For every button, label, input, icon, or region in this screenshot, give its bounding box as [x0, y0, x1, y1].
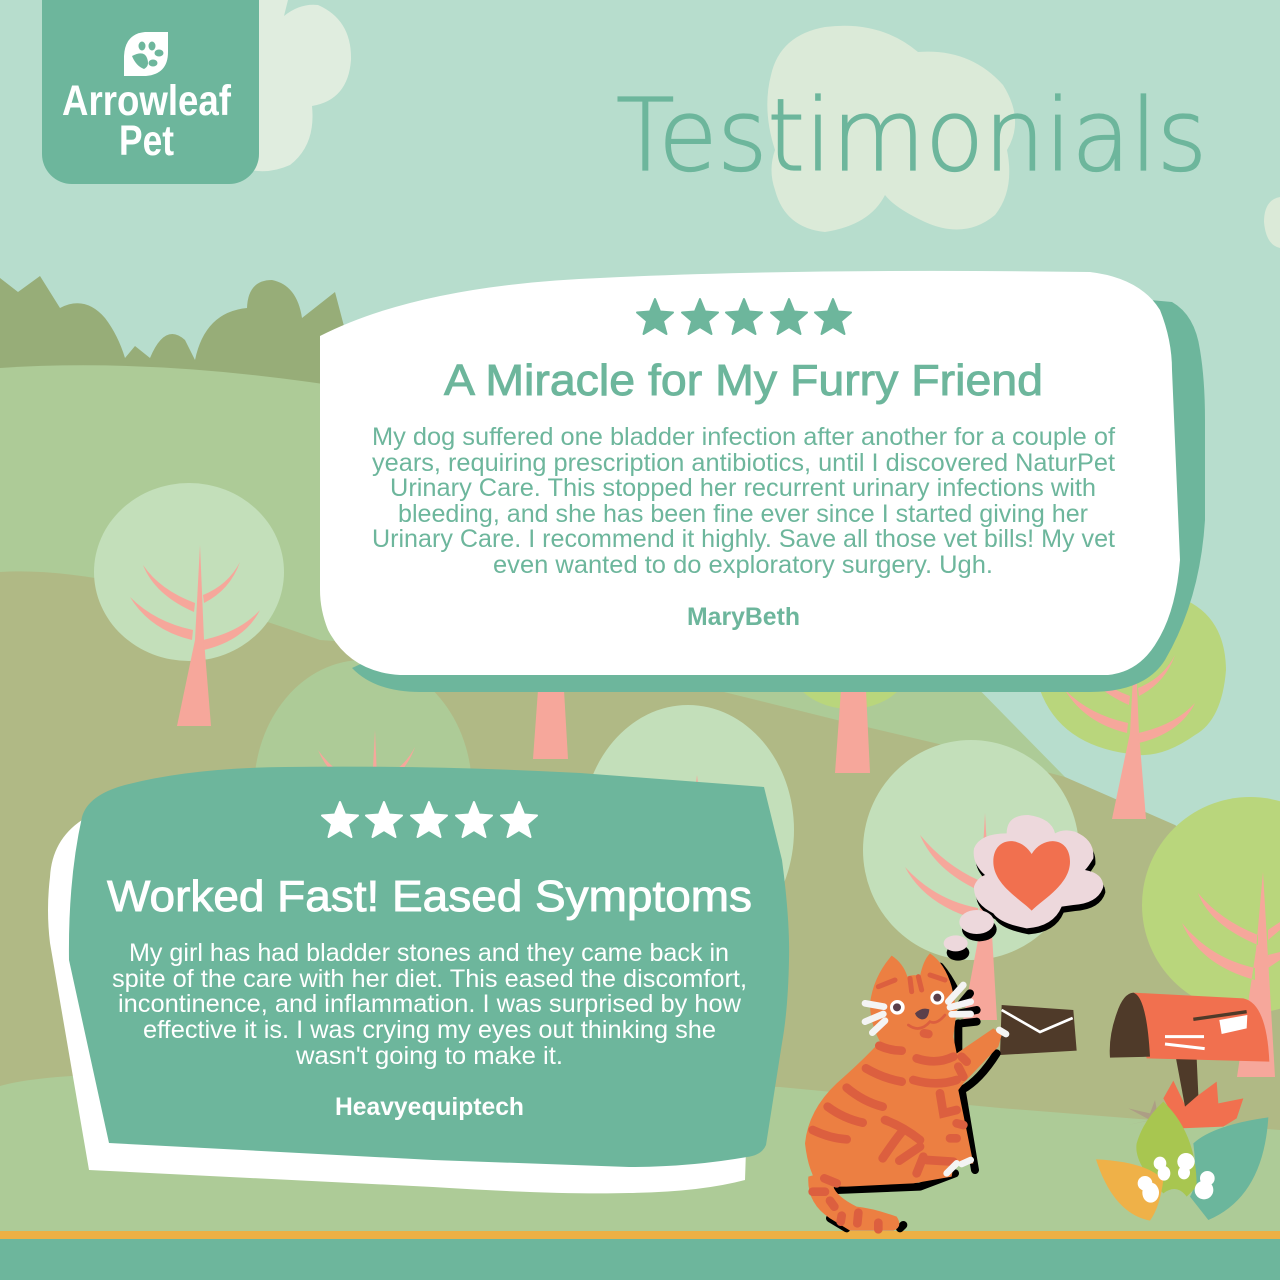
hill: upper left — [0, 365, 700, 700]
cat eyes — [890, 991, 944, 1019]
author: MaryBeth — [687, 603, 800, 631]
tree: left — [94, 483, 284, 726]
leaves and paw prints — [1096, 1102, 1268, 1221]
heart — [993, 841, 1070, 911]
illustration: cat, thought bubble, mailbox — [805, 815, 1269, 1231]
panel: testimonial 1 — [320, 271, 1205, 692]
testimonial text: My girl has had bladder stones and they came back in — [129, 939, 729, 967]
cloud: right edge — [1264, 197, 1280, 248]
cloud: behind title — [767, 26, 1015, 232]
card body — [320, 271, 1180, 675]
tree: right upper lime — [1040, 590, 1226, 819]
testimonial text: incontinence, and inflammation. I was surprised by how — [118, 990, 742, 1018]
testimonial text: Urinary Care. I recommend it highly. Save all those vet bills! My vet — [372, 525, 1115, 553]
logo wordmark: Arrowleaf — [62, 77, 232, 125]
testimonial text: bleeding, and she has been fine ever since I started giving her — [398, 500, 1088, 528]
mailbox — [1110, 993, 1269, 1107]
mailbox plant — [1128, 1081, 1243, 1128]
card shadow — [352, 300, 1205, 692]
logo badge — [42, 0, 259, 184]
tree: far right lime — [1142, 797, 1280, 1077]
testimonial text: even wanted to do exploratory surgery. Ugh. — [493, 551, 993, 579]
cat whiskers — [865, 985, 1006, 1173]
tree: lime hidden top — [788, 611, 912, 773]
testimonial text — [372, 423, 1115, 579]
heading: Worked Fast! Eased Symptoms — [107, 872, 752, 921]
rating stars — [322, 802, 537, 837]
bottom band — [0, 1231, 1280, 1280]
testimonial text: effective it is. I was crying my eyes out thinking she — [143, 1016, 716, 1044]
testimonial text — [112, 939, 747, 1070]
hill: middle light — [600, 650, 1200, 1000]
card shadow — [48, 820, 746, 1193]
hill: olive — [0, 571, 1280, 1200]
logo leaf icon — [124, 32, 168, 76]
testimonial text: My dog suffered one bladder infection after another for a couple of — [372, 423, 1115, 451]
cat stripes — [813, 1033, 967, 1229]
thought bubble — [944, 815, 1105, 961]
author: Heavyequiptech — [335, 1093, 524, 1121]
tree trunk under card — [533, 690, 568, 759]
tree: center — [582, 705, 794, 955]
tree: behind cat — [863, 740, 1079, 1020]
logo wordmark — [62, 77, 232, 165]
card body — [69, 767, 789, 1167]
hill: front — [0, 1073, 1280, 1240]
title: Testimonials — [616, 77, 1207, 194]
testimonial text: wasn't going to make it. — [295, 1042, 563, 1070]
panel: testimonial 2 — [48, 767, 789, 1193]
envelope — [1000, 1005, 1077, 1055]
testimonial text: Urinary Care. This stopped her recurrent urinary infections with — [390, 474, 1096, 502]
heading: A Miracle for My Furry Friend — [444, 356, 1043, 405]
tree: under card left — [254, 660, 472, 920]
cat — [805, 953, 1006, 1231]
rating stars — [637, 299, 851, 334]
forest treeline — [0, 276, 370, 420]
logo wordmark: Pet — [119, 117, 174, 165]
testimonial text: years, requiring prescription antibiotics, until I discovered NaturPet — [372, 449, 1115, 477]
cloud: behind logo — [250, 0, 351, 171]
testimonial text: spite of the care with her diet. This eased the discomfort, — [112, 965, 747, 993]
